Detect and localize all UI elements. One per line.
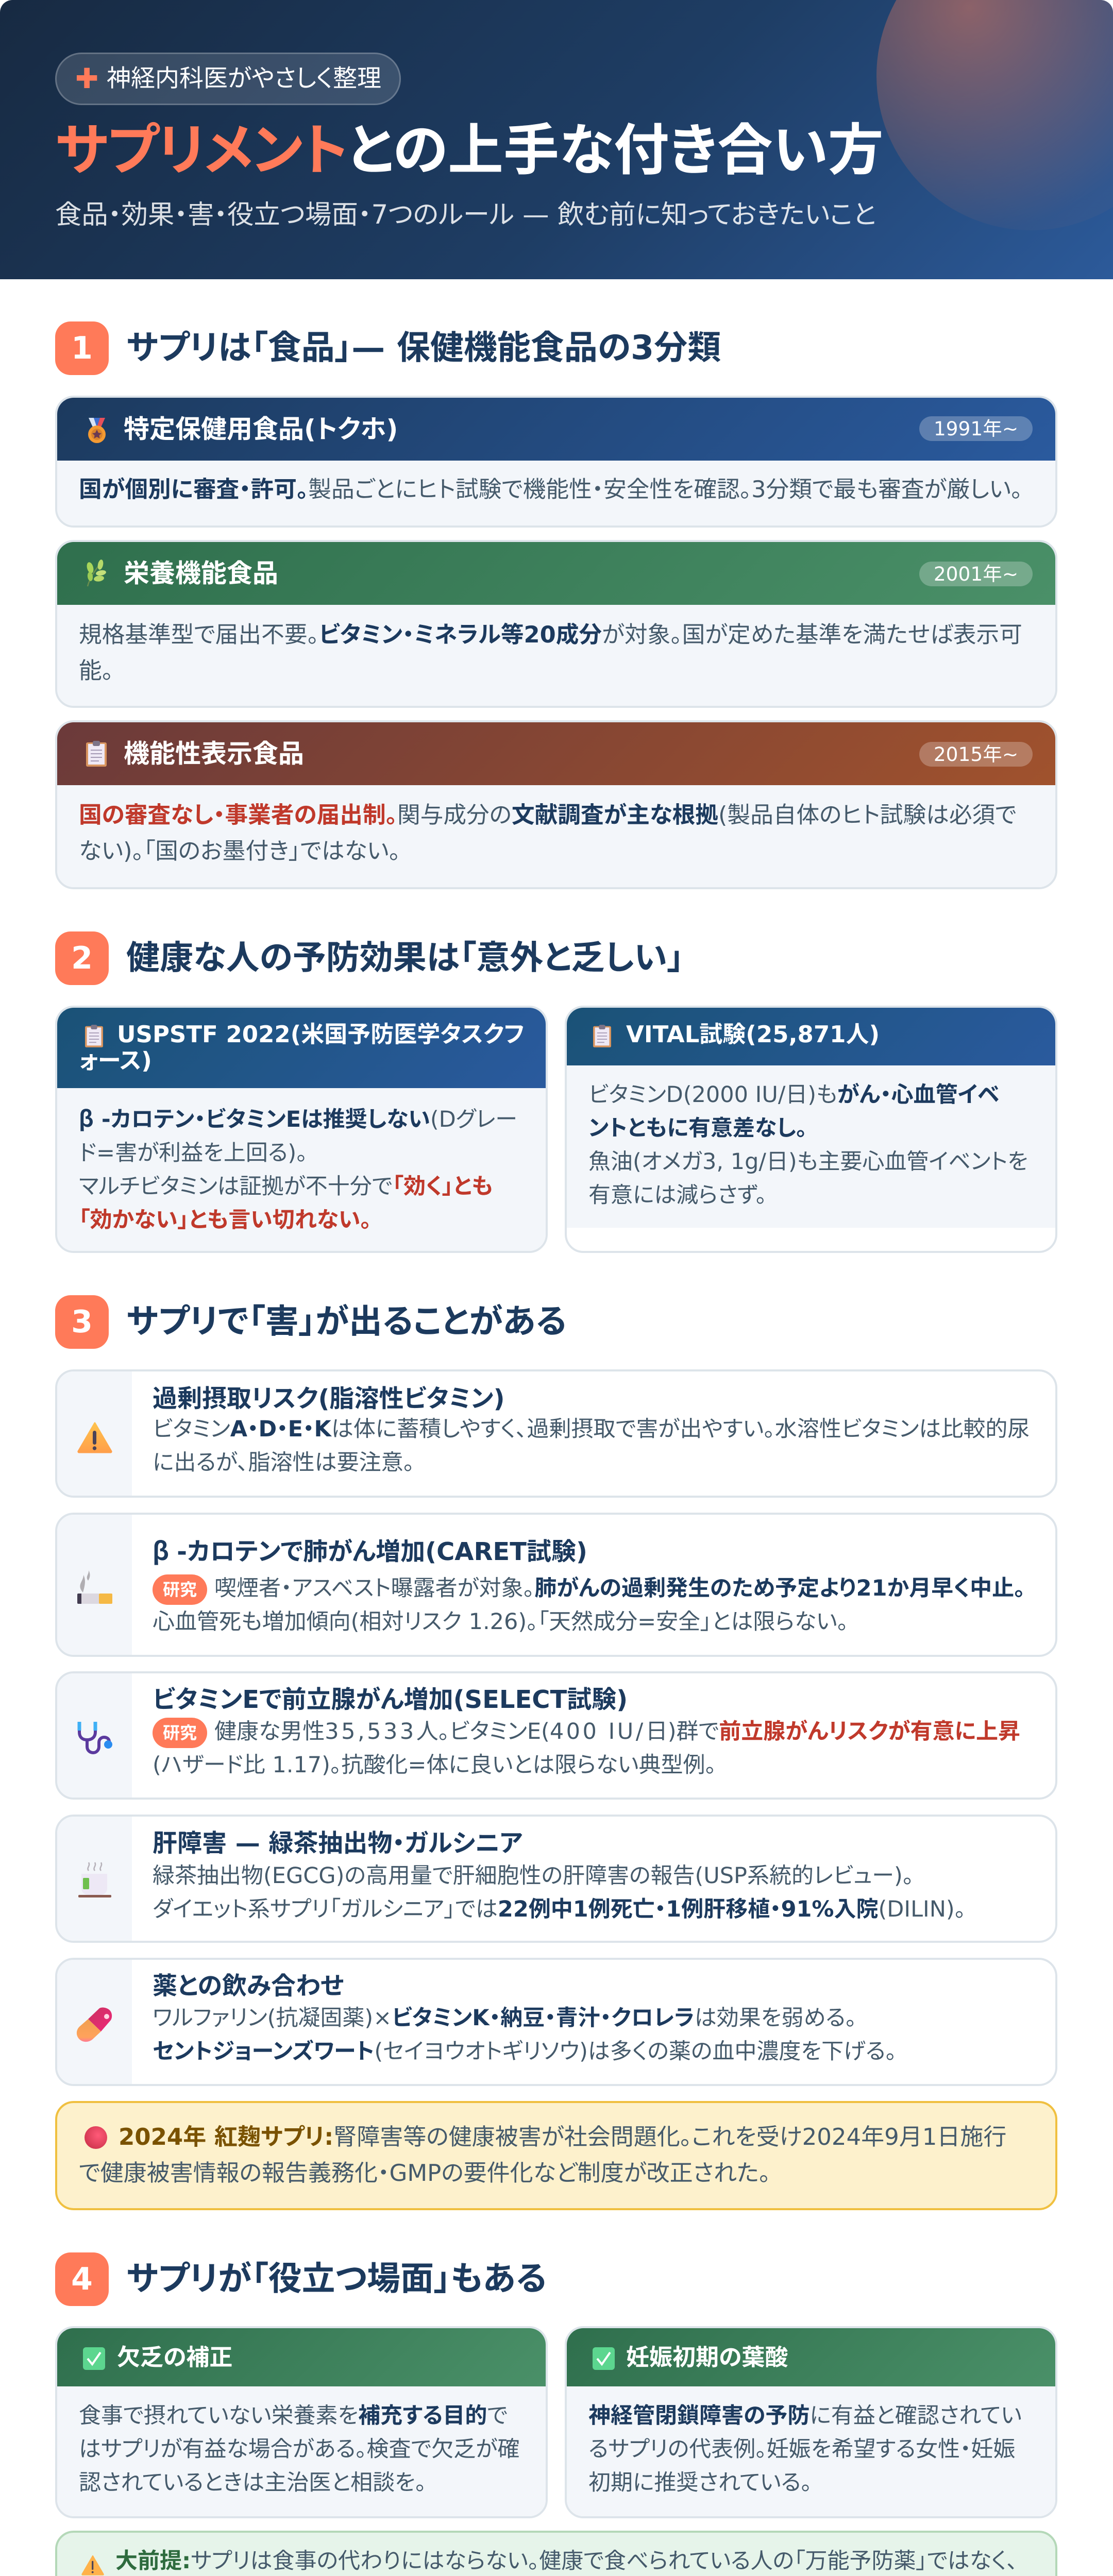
nutrient header: 栄養機能食品 <box>124 558 278 588</box>
deficiency header: 欠乏の補正 <box>117 2344 232 2371</box>
deficiency body: はサプリが有益な場合がある。検査で欠乏が確 <box>79 2436 519 2462</box>
tokuho header: 特定保健用食品(トクホ) <box>124 414 398 444</box>
study tag <box>153 1574 207 1605</box>
interactions description <box>153 2002 897 2069</box>
year tag <box>919 416 1033 441</box>
VITAL body <box>567 1065 1055 1228</box>
interactions description: ワルファリン(抗凝固薬)×ビタミンK・納豆・青汁・クロレラは効果を弱める。 <box>153 2005 856 2031</box>
panel: USPSTF 2022 <box>55 1006 548 1253</box>
claim body: ない)。「国のお墨付き」ではない。 <box>79 838 400 865</box>
section number 4 <box>55 2252 109 2306</box>
red yeast text: 2024年 紅麹サプリ:腎障害等の健康被害が社会問題化。これを受け2024年9月1日施行 <box>119 2123 1006 2150</box>
icon: cigarette <box>77 1570 112 1604</box>
title: サプリメントとの上手な付き合い方 <box>55 118 884 183</box>
USPSTF body: β-カロテン・ビタミンEは推奨しない(Dグレー <box>79 1101 517 1133</box>
icon: warning <box>77 1422 112 1453</box>
USPSTF header: ォース) <box>79 1047 152 1074</box>
claim body: 国の審査なし・事業者の届出制。関与成分の文献調査が主な根拠(製品自体のヒト試験は必須で <box>79 802 1017 828</box>
panel: functional claim food <box>55 720 1057 889</box>
deficiency body: 認されているときは主治医と相談を。 <box>79 2470 426 2496</box>
panel: folic acid <box>565 2326 1057 2518</box>
folic body: 神経管閉鎖障害の予防に有益と確認されてい <box>588 2403 1022 2429</box>
interactions title: 薬との飲み合わせ <box>153 1972 344 2001</box>
icon: clipboard <box>86 741 107 767</box>
folic body: 初期に推奨されている。 <box>588 2470 812 2496</box>
subtitle: 食品・効果・害・役立つ場面・7つのルール — 飲む前に知っておきたいこと <box>55 199 876 230</box>
panel: CARET beta-carotene <box>55 1513 1057 1657</box>
excess title: 過剰摂取リスク(脂溶性ビタミン) <box>153 1384 505 1413</box>
USPSTF body <box>57 1088 546 1251</box>
section 4: useful situations <box>55 2252 1057 2576</box>
tokuho body <box>57 461 1055 526</box>
USPSTF header <box>57 1008 546 1088</box>
section number 3: 3 <box>71 1304 93 1340</box>
deficiency body <box>57 2386 546 2516</box>
section number 3 <box>55 1295 109 1349</box>
study tag: 研究 <box>163 1580 197 1600</box>
SELECT description <box>153 1715 1020 1782</box>
folic body: るサプリの代表例。妊娠を希望する女性・妊娠 <box>588 2436 1015 2462</box>
claim body <box>57 785 1055 887</box>
section 3: harms <box>55 1295 1057 2210</box>
icon: stethoscope <box>77 1721 113 1755</box>
section 2: prevention evidence <box>55 931 1057 1253</box>
CARET title: β-カロテンで肺がん増加(CARET試験) <box>153 1531 587 1567</box>
liver description: ダイエット系サプリ「ガルシニア」では22例中1例死亡・1例肝移植・91%入院(DILIN)。 <box>153 1896 966 1922</box>
icon: capsule <box>77 2008 112 2043</box>
section 4 heading: サプリが「役立つ場面」もある <box>126 2260 547 2298</box>
callout: 2024 red yeast <box>55 2101 1057 2210</box>
panel: nutrient function food <box>55 540 1057 708</box>
icon: medal <box>88 418 106 443</box>
nutrient body: 規格基準型で届出不要。ビタミン・ミネラル等20成分が対象。国が定めた基準を満たせば表示可 <box>79 621 1022 648</box>
CARET description: 喫煙者・アスベスト曝露者が対象。肺がんの過剰発生のため予定より21か月早く中止。 <box>214 1575 1025 1601</box>
folic header: 妊娠初期の葉酸 <box>626 2344 788 2371</box>
panel: deficiency <box>55 2326 548 2518</box>
section number 1 <box>55 321 109 375</box>
USPSTF body: ド=害が利益を上回る)。 <box>79 1140 308 1166</box>
year tag <box>919 742 1033 767</box>
panel: SELECT vitamin E <box>55 1671 1057 1800</box>
CARET description <box>153 1572 1025 1639</box>
VITAL body: ビタミンD(2000 IU/日)もがん・心血管イベ <box>588 1082 1000 1108</box>
header banner <box>0 0 1113 279</box>
section number 1: 1 <box>71 330 93 366</box>
deficiency body: 食事で摂れていない栄養素を補充する目的で <box>79 2403 508 2429</box>
SELECT description: 健康な男性35,533人。ビタミンE(400 IU/日)群で前立腺がんリスクが有意に上昇 <box>214 1719 1020 1744</box>
excess description: に出るが、脂溶性は要注意。 <box>153 1450 414 1476</box>
year tag <box>919 562 1033 586</box>
SELECT description: (ハザード比 1.17)。抗酸化=体に良いとは限らない典型例。 <box>153 1752 716 1778</box>
claim header: 機能性表示食品 <box>124 739 304 769</box>
section number 2: 2 <box>71 940 93 976</box>
USPSTF body: マルチビタミンは証拠が不十分で「効く」とも <box>79 1174 493 1199</box>
badge: ✚ <box>75 62 98 95</box>
VITAL header <box>567 1008 1055 1065</box>
nutrient body: 能。 <box>79 657 113 684</box>
excess description <box>153 1416 1030 1476</box>
icon: red circle <box>85 2126 107 2149</box>
badge: 神経内科医がやさしく整理 <box>107 64 381 93</box>
liver title: 肝障害 — 緑茶抽出物・ガルシニア <box>153 1829 522 1858</box>
icon: check <box>83 2347 105 2370</box>
SELECT title: ビタミンEで前立腺がん増加(SELECT試験) <box>153 1685 628 1714</box>
icon: clipboard <box>85 1025 103 1047</box>
USPSTF body: 「効かない」とも言い切れない。 <box>79 1207 372 1233</box>
VITAL body: ントともに有意差なし。 <box>588 1115 807 1141</box>
claim header <box>57 722 1055 785</box>
VITAL body: 魚油(オメガ3, 1g/日)も主要心血管イベントを <box>588 1149 1028 1175</box>
excess description: ビタミンA・D・E・Kは体に蓄積しやすく、過剰摂取で害が出やすい。水溶性ビタミンは比較的尿 <box>153 1416 1030 1442</box>
study tag <box>153 1718 207 1748</box>
section 1: three categories <box>55 321 1057 889</box>
folic header <box>567 2328 1055 2386</box>
panel: excess intake <box>55 1369 1057 1498</box>
decorative glow circle <box>876 0 1113 230</box>
deficiency header <box>57 2328 546 2386</box>
section 3 heading: サプリで「害」が出ることがある <box>126 1302 567 1341</box>
year tag: 1991年~ <box>934 417 1018 440</box>
tokuho body: 国が個別に審査・許可。製品ごとにヒト試験で機能性・安全性を確認。3分類で最も審査が厳しい。 <box>79 476 1022 503</box>
callout: premise <box>55 2531 1057 2576</box>
interactions description: セントジョーンズワート(セイヨウオトギリソウ)は多くの薬の血中濃度を下げる。 <box>153 2039 897 2064</box>
nutrient body <box>57 605 1055 706</box>
year tag: 2001年~ <box>934 563 1018 585</box>
tokuho header <box>57 398 1055 461</box>
icon: warning <box>81 2555 104 2575</box>
VITAL body: 有意には減らさず。 <box>588 1182 767 1208</box>
study tag: 研究 <box>163 1723 197 1743</box>
section 2 heading: 健康な人の予防効果は「意外と乏しい」 <box>126 939 684 977</box>
CARET description: 心血管死も増加傾向(相対リスク 1.26)。「天然成分=安全」とは限らない。 <box>153 1609 848 1635</box>
section number 4: 4 <box>71 2261 93 2297</box>
section number 2 <box>55 931 109 985</box>
folic body <box>567 2386 1055 2516</box>
badge <box>55 53 401 105</box>
panel: liver damage <box>55 1815 1057 1943</box>
panel: tokuho <box>55 396 1057 528</box>
liver description: 緑茶抽出物(EGCG)の高用量で肝細胞性の肝障害の報告(USP系統的レビュー)。 <box>153 1863 914 1889</box>
icon: check <box>593 2347 615 2370</box>
nutrient header <box>57 542 1055 605</box>
icon: herb <box>87 560 106 586</box>
callout: 2024 red yeast: で健康被害情報の報告義務化・GMPの要件化など制度が改正された。 <box>79 2159 770 2187</box>
VITAL header: VITAL試験(25,871人) <box>626 1021 880 1048</box>
year tag: 2015年~ <box>934 743 1018 766</box>
premise text: 大前提:サプリは食事の代わりにはならない。健康で食べられている人の「万能予防薬」ではなく、 <box>115 2548 1018 2574</box>
liver description <box>153 1859 966 1926</box>
USPSTF header: USPSTF 2022(米国予防医学タスクフ <box>117 1021 525 1048</box>
icon: clipboard <box>593 1025 611 1047</box>
panel: drug interactions <box>55 1958 1057 2086</box>
panel: VITAL trial <box>565 1006 1057 1253</box>
section 1 heading: サプリは「食品」— 保健機能食品の3分類 <box>126 329 721 367</box>
icon: green tea <box>77 1862 112 1898</box>
